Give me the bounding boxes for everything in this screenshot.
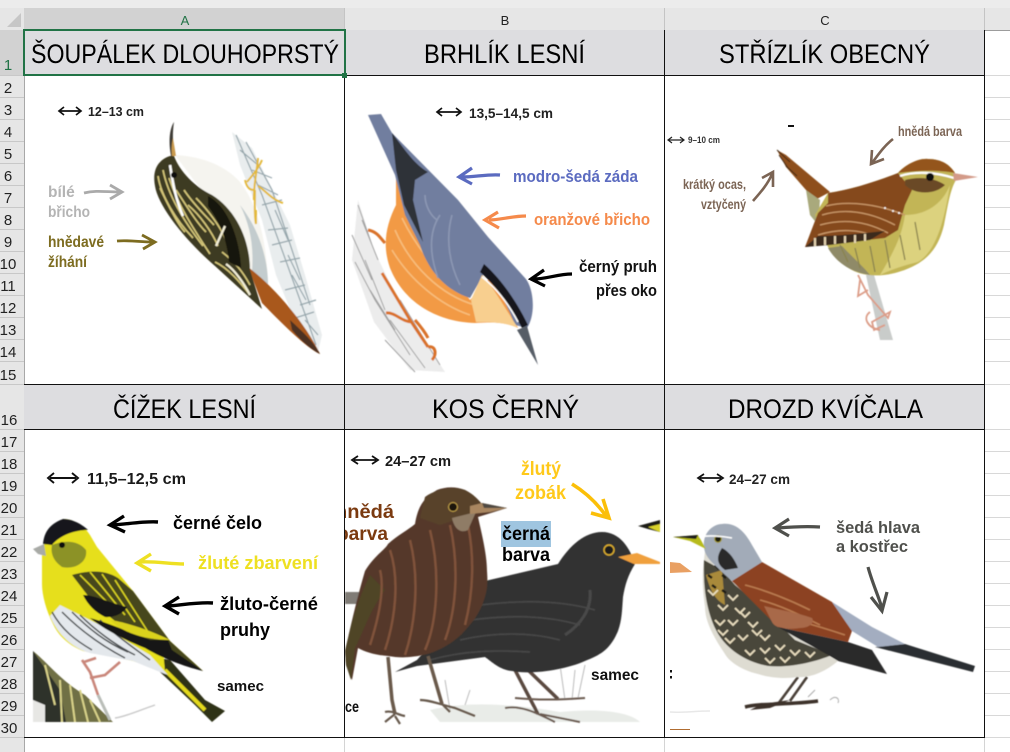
label: žluté zbarvení: žluté zbarvení [198,553,319,573]
spreadsheet row header strip: 17 [1,434,17,451]
label: hnědavé žíhání [48,234,155,271]
spreadsheet row header strip: 30 [1,720,17,737]
bird illustration: female kos [345,487,507,724]
spreadsheet row header strip: 18 [1,456,17,473]
heading: šoupálek: ŠOUPÁLEK DLOUHOPRSTÝ [31,39,339,69]
spreadsheet column header bar: B [501,13,509,28]
spreadsheet row header strip: 24 [1,588,17,605]
spreadsheet row header strip [0,30,24,752]
bird illustration: čížek [33,519,225,722]
spreadsheet column header bar: C [820,13,830,28]
label: hnědá barva (clipped): barva [337,524,388,545]
spreadsheet row header strip: 3 [4,102,12,119]
label: žlutý zobák: žlutý [521,459,561,480]
spreadsheet row header strip: 23 [1,566,17,583]
spreadsheet row header strip: 26 [1,632,17,649]
heading band row 16 [24,385,985,429]
label: žlutý zobák: zobák [515,483,566,504]
label: černé čelo [110,513,262,533]
label: hnědá barva (clipped) [345,503,394,540]
bird illustration: male kos [395,520,660,722]
label: žluté zbarvení [137,553,319,573]
label: samice fragment: ce [345,699,359,716]
spreadsheet row header strip: 15 [0,367,16,384]
label: šedá hlava a kostřec [775,518,921,611]
label: černé čelo: černé čelo [173,513,262,533]
spreadsheet row header strip: 10 [0,256,16,273]
spreadsheet column header bar [0,0,1010,30]
spreadsheet row header strip: 16 [1,412,17,429]
spreadsheet row header strip: 25 [1,610,17,627]
panel: střízlík obecný [668,39,978,340]
size: 9–10 cm: 9–10 cm [688,135,720,146]
label: šedá hlava a kostřec: šedá hlava [836,518,921,537]
spreadsheet row header strip: 22 [1,544,17,561]
panel: šoupálek dlouhoprstý [24,30,347,354]
heading: drozd: DROZD KVÍČALA [728,394,923,424]
label: černá barva (highlighted) [501,521,551,566]
spreadsheet row header strip: 11 [0,278,16,295]
spreadsheet row header strip: 5 [4,146,12,163]
label: bílé břicho: břicho [48,204,90,221]
label: oranžové břicho: oranžové břicho [534,210,650,229]
label: bílé břicho [48,184,122,221]
panel: kos černý [335,394,660,724]
label: krátký ocas, vztyčený [683,172,773,212]
size: 24–27 cm: 24–27 cm [729,471,790,487]
label: žluto-černé pruhy: pruhy [220,620,270,640]
panel: brhlík lesní [352,39,657,372]
label: žluto-černé pruhy [165,594,318,640]
label: hnědá barva: hnědá barva [898,124,962,139]
label: hnědavé žíhání: žíhání [48,254,88,271]
size: 11,5–12,5 cm [48,471,186,488]
size: 24–27 cm: 24–27 cm [385,454,451,470]
heading: čížek: ČÍŽEK LESNÍ [113,394,257,424]
size: 9–10 cm [668,125,794,146]
size: 24–27 cm [698,471,790,487]
spreadsheet row header strip: 9 [4,234,12,251]
label: černý pruh přes oko [531,257,657,300]
spreadsheet column header bar: A [181,13,190,28]
size: 24–27 cm [352,454,451,470]
size: 12–13 cm: 12–13 cm [88,104,144,119]
spreadsheet row header strip: 14 [0,344,16,361]
label: hnědavé žíhání: hnědavé [48,234,104,251]
heading: brhlík: BRHLÍK LESNÍ [424,39,586,69]
label: černá barva (highlighted): barva [502,545,550,566]
label: žlutý zobák [515,459,609,518]
label: černá barva (highlighted): černá [502,524,550,545]
size: 13,5–14,5 cm: 13,5–14,5 cm [469,105,553,121]
label: krátký ocas, vztyčený: vztyčený [701,197,746,212]
label: samec: samec [217,678,264,695]
spreadsheet row header strip: 8 [4,212,12,229]
spreadsheet row header strip: 19 [1,478,17,495]
label: modro-šedá záda: modro-šedá záda [513,167,638,186]
spreadsheet row header strip: 2 [4,80,12,97]
bird illustration: střízlík [777,150,978,340]
label: bílé břicho: bílé [48,184,75,201]
heading band row 1 [24,30,985,75]
label: modro-šedá záda [459,167,638,186]
panel: drozd kvíčala [670,394,975,730]
spreadsheet row header strip: 29 [1,698,17,715]
spreadsheet row header strip: 27 [1,654,17,671]
empty grid right of table [344,76,1010,752]
label: černý pruh přes oko: černý pruh [579,257,657,276]
spreadsheet row header strip: 1 [4,57,12,74]
size: 11,5–12,5 cm: 11,5–12,5 cm [87,471,186,488]
spreadsheet row header strip: 12 [0,300,16,317]
spreadsheet row header strip: 13 [0,322,16,339]
heading: střízlík: STŘÍZLÍK OBECNÝ [719,39,930,69]
label: oranžové břicho [485,210,650,229]
spreadsheet row header strip: 6 [4,168,12,185]
bird illustration: brhlík [352,114,538,372]
label: samec: samec [591,667,639,684]
label: černý pruh přes oko: přes oko [596,281,657,300]
panel: čížek lesní [33,394,319,722]
spreadsheet row header strip: 4 [4,124,12,141]
bird illustration: drozd [673,524,975,710]
heading: kos: KOS ČERNÝ [432,394,579,424]
fragments of neighbouring picture [670,562,710,730]
size: 12–13 cm [59,104,144,119]
label: hnědá barva (clipped): hnědá [335,502,394,523]
spreadsheet row header strip: 20 [1,500,17,517]
label: hnědá barva [871,124,962,164]
selected cell outline [24,30,347,78]
label: žluto-černé pruhy: žluto-černé [220,594,318,614]
bird illustration: šoupálek [154,122,322,354]
spreadsheet row header strip: 7 [4,190,12,207]
label: šedá hlava a kostřec: a kostřec [836,537,908,556]
label: krátký ocas, vztyčený: krátký ocas, [683,177,746,192]
spreadsheet row header strip: 28 [1,676,17,693]
spreadsheet row header strip: 21 [1,522,17,539]
